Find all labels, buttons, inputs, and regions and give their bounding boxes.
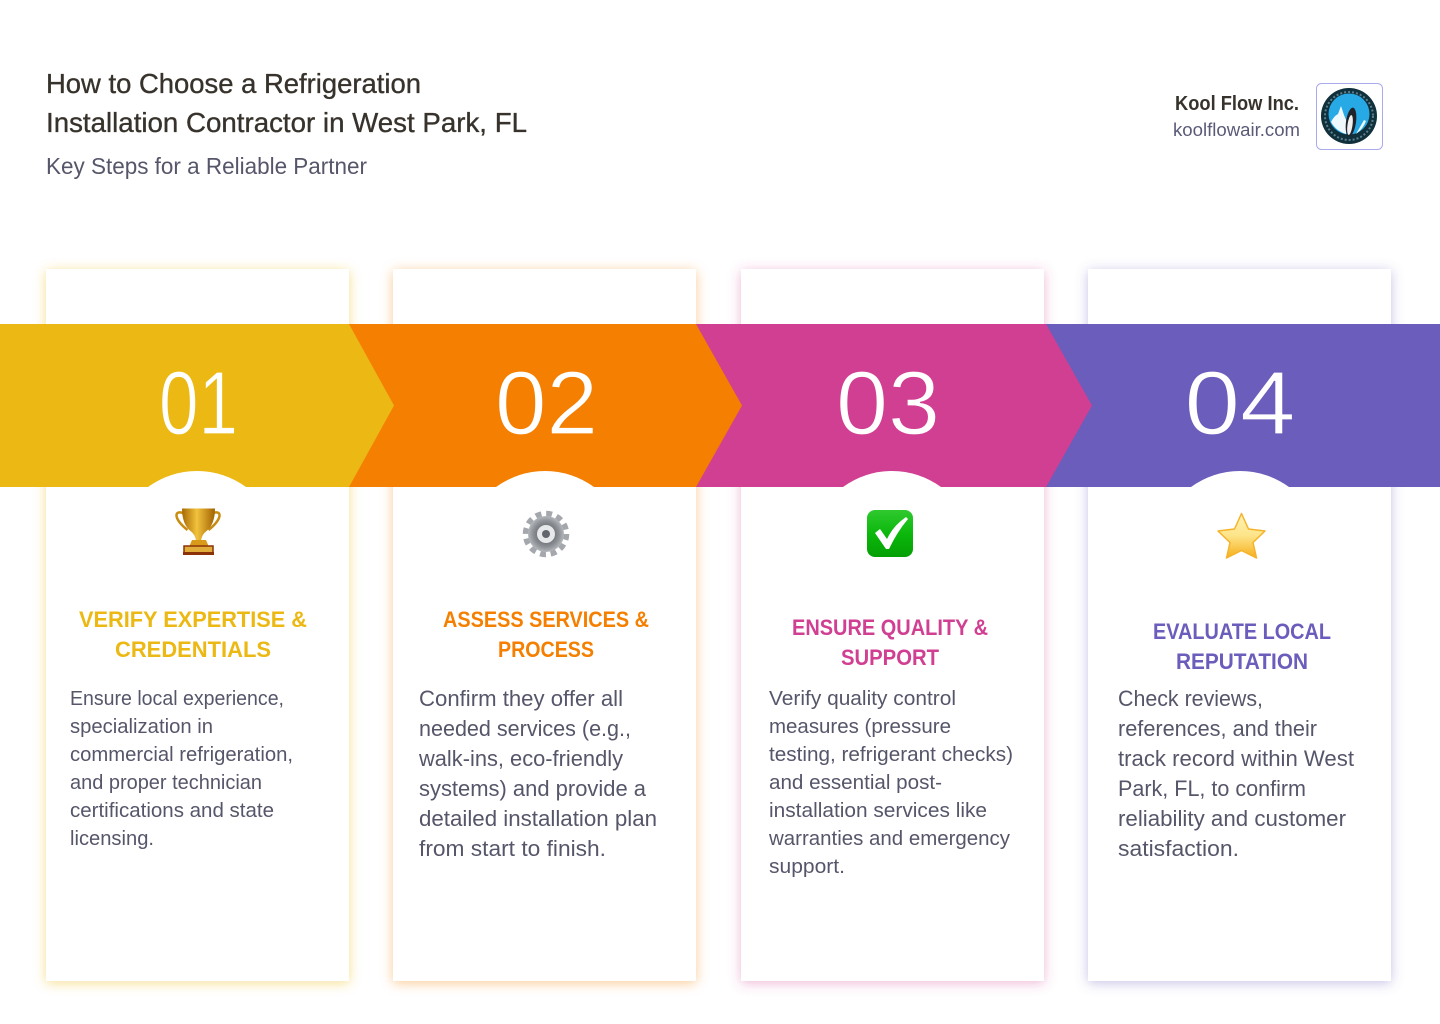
step description: detailed installation plan [419, 806, 657, 831]
number 03: 03 [836, 354, 940, 454]
step heading: REPUTATION [1176, 649, 1308, 674]
step heading: SUPPORT [841, 645, 940, 670]
arrow: step 4 [1046, 324, 1440, 487]
step description [418, 686, 657, 861]
step heading [792, 615, 988, 670]
step description: Park, FL, to confirm [1118, 776, 1306, 801]
number 02: 02 [495, 354, 598, 454]
step heading: CREDENTIALS [115, 637, 271, 662]
title [46, 68, 527, 138]
step description: Ensure local experience, [70, 687, 284, 710]
step description: systems) and provide a [419, 776, 647, 801]
step description: Check reviews, [1118, 686, 1263, 711]
step description: licensing. [70, 827, 154, 850]
arrow: step 3 [696, 324, 1092, 487]
logo [1316, 84, 1382, 150]
step heading: EVALUATE LOCAL [1153, 619, 1331, 644]
title: How to Choose a Refrigeration [46, 68, 421, 99]
step description: testing, refrigerant checks) [769, 743, 1013, 766]
step description: walk-ins, eco-friendly [418, 746, 623, 771]
step description: satisfaction. [1118, 836, 1239, 861]
step description: and essential post- [769, 771, 942, 794]
step heading [1153, 619, 1331, 674]
icon: check mark [867, 510, 913, 557]
step description: reliability and customer [1118, 806, 1346, 831]
step description: references, and their [1118, 716, 1317, 741]
step heading: PROCESS [498, 637, 594, 662]
step description: certifications and state [70, 799, 274, 822]
step heading: VERIFY EXPERTISE & [79, 607, 307, 632]
step heading: ASSESS SERVICES & [443, 607, 649, 632]
step heading: ENSURE QUALITY & [792, 615, 988, 640]
step description: Confirm they offer all [419, 686, 623, 711]
brand block [1173, 84, 1382, 150]
step description: installation services like [769, 799, 987, 822]
panel: step 1 [46, 269, 349, 981]
step description: support. [769, 855, 845, 878]
step description: warranties and emergency [768, 827, 1011, 850]
step description: needed services (e.g., [419, 716, 631, 741]
step description: and proper technician [70, 771, 262, 794]
panel: step 4 [1088, 269, 1391, 981]
company website: koolflowair.com [1173, 120, 1300, 140]
icon: gear [527, 515, 565, 553]
number 04: 04 [1184, 354, 1296, 454]
step description [768, 687, 1013, 878]
step description [70, 687, 293, 850]
company name: Kool Flow Inc. [1175, 93, 1299, 115]
panel: step 3 [741, 269, 1044, 981]
step description [1118, 686, 1354, 861]
arrow: step 1 [0, 324, 394, 487]
step description: commercial refrigeration, [70, 743, 293, 766]
step description: Verify quality control [769, 687, 956, 710]
step description: track record within West [1118, 746, 1354, 771]
step description: specialization in [70, 715, 213, 738]
title: Installation Contractor in West Park, FL [46, 107, 527, 138]
step heading [443, 607, 649, 662]
subtitle: Key Steps for a Reliable Partner [46, 153, 367, 179]
number 01: 01 [159, 354, 238, 454]
icon: star [1218, 514, 1265, 558]
step heading [79, 607, 307, 662]
step description: from start to finish. [419, 836, 606, 861]
panel: step 2 [393, 269, 696, 981]
step description: measures (pressure [769, 715, 951, 738]
arrow: step 2 [349, 324, 742, 487]
icon: trophy [176, 508, 220, 555]
